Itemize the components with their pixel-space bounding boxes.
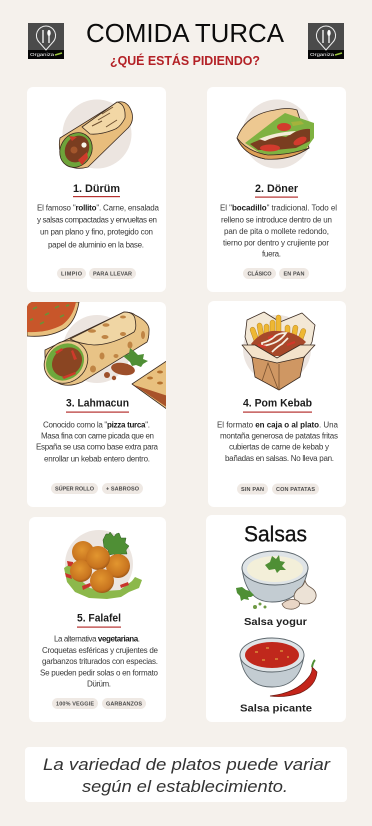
panel: Falafel <box>29 517 166 722</box>
icon: pom kebab box <box>242 312 315 390</box>
description: tierno por dentro y crujiente por <box>223 239 329 248</box>
description: pan de pita o mollete redondo, <box>224 227 329 236</box>
tags: SIN PAN <box>241 487 264 493</box>
tags: SÚPER ROLLO <box>55 486 95 492</box>
tags: PARA LLEVAR <box>93 272 132 278</box>
tags: GARBANZOS <box>106 702 142 708</box>
description: garbanzos triturados con especias. <box>42 657 158 666</box>
description: papel de aluminio en la base. <box>48 240 144 249</box>
tags: 100% VEGGIE <box>56 702 94 708</box>
description: Conocido como la "pizza turca". <box>43 420 150 429</box>
tags <box>51 483 143 494</box>
icon: falafel plate <box>64 530 142 599</box>
description: El formato en caja o al plato. Una <box>217 420 339 429</box>
logo left: Organiza <box>30 52 55 57</box>
icon: salsa yogur <box>236 551 316 609</box>
description: El famoso "rollito". Carne, ensalada <box>37 204 160 213</box>
description: Se pueden pedir solas o en formato <box>40 669 159 678</box>
description: enrollar un kebab entero dentro. <box>44 455 150 464</box>
label: salsa picante: Salsa picante <box>240 702 312 714</box>
title: COMIDA TURCA <box>86 20 284 48</box>
tags <box>57 268 136 279</box>
logo right <box>308 23 344 59</box>
icon: dürüm wrap <box>53 100 132 173</box>
description <box>36 420 159 464</box>
icon: lahmacun roll <box>27 302 168 410</box>
dish title: 1. Dürüm <box>73 183 120 195</box>
description: relleno se introduce dentro de un <box>221 215 332 224</box>
tags <box>243 268 309 279</box>
dish title: 5. Falafel <box>77 612 121 624</box>
description: montaña generosa de patatas fritas <box>220 431 338 440</box>
dish title: 4. Pom Kebab <box>243 398 312 410</box>
icon: döner pita <box>237 100 314 168</box>
description <box>217 420 339 463</box>
description: fuera. <box>262 250 281 259</box>
subtitle: ¿QUÉ ESTÁS PIDIENDO? <box>110 53 260 68</box>
footer note: La variedad de platos puede variar <box>43 756 332 774</box>
heading: Salsas: Salsas <box>244 522 307 546</box>
description: Croquetas esféricas y crujientes de <box>42 646 159 655</box>
description: bañadas en salsas. No lleva pan. <box>225 454 334 463</box>
description: Dürüm. <box>87 680 111 689</box>
description: y salsas compactadas y envueltas en <box>37 216 157 225</box>
description <box>40 634 159 689</box>
description: cubiertas de carne de kebab y <box>229 443 329 452</box>
description <box>220 204 337 259</box>
tags <box>237 484 319 494</box>
dish title: 2. Döner <box>255 183 299 195</box>
description <box>37 204 160 249</box>
tags <box>52 698 146 709</box>
panel: Lahmacun <box>27 302 168 507</box>
description: El "bocadillo" tradicional. Todo el <box>220 204 337 213</box>
dish title: 3. Lahmacun <box>66 398 129 410</box>
logo left <box>28 23 64 59</box>
panel: Salsas <box>206 515 346 722</box>
panel: Pom Kebab <box>208 301 346 507</box>
panel: Döner <box>207 87 346 292</box>
icon: salsa picante <box>240 638 317 697</box>
description: España se usa como base extra para <box>36 443 159 452</box>
footer note: según el establecimiento. <box>82 778 288 796</box>
tags: + SABROSO <box>106 486 140 492</box>
tags: EN PAN <box>284 272 305 278</box>
panel: Dürüm <box>27 87 166 292</box>
tags: CLÁSICO <box>248 270 272 278</box>
label: salsa yogur: Salsa yogur <box>244 616 307 628</box>
description: Masa fina con carne picada que en <box>41 431 154 440</box>
description: un pan plano y fino, protegido con <box>40 227 153 236</box>
tags: CON PATATAS <box>276 487 315 493</box>
footer note <box>25 747 347 802</box>
description: La alternativa vegetariana. <box>54 634 140 643</box>
tags: LIMPIO <box>61 272 83 278</box>
logo right: Organiza <box>310 52 335 57</box>
